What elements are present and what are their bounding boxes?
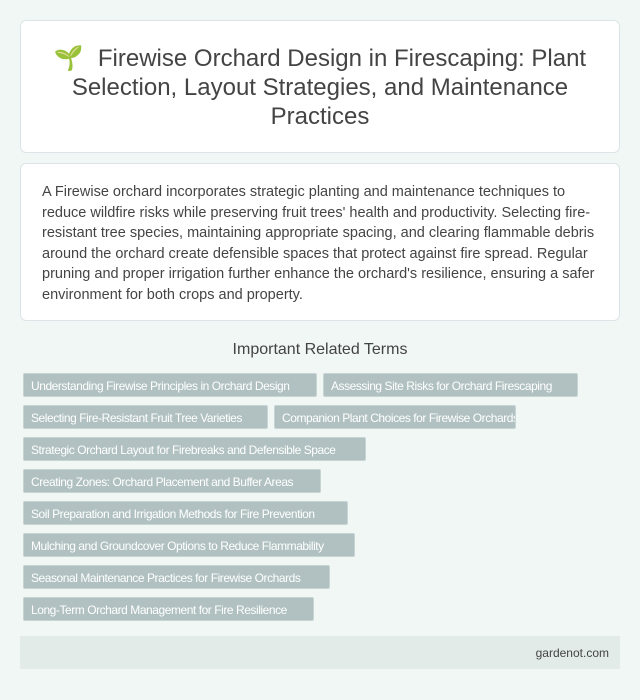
tags: Creating Zones: Orchard Placement and Buffer Areas bbox=[31, 475, 293, 489]
tags: Long-Term Orchard Management for Fire Resilience bbox=[31, 603, 287, 617]
tags: Understanding Firewise Principles in Orchard Design bbox=[31, 379, 290, 393]
tags: Selecting Fire-Resistant Fruit Tree Varieties bbox=[31, 411, 242, 425]
section heading: Important Related Terms bbox=[233, 341, 407, 358]
footer source: gardenot.com bbox=[536, 646, 609, 660]
footer bbox=[20, 636, 620, 669]
tags: Strategic Orchard Layout for Firebreaks and Defensible Space bbox=[31, 443, 336, 457]
tags: Mulching and Groundcover Options to Reduce Flammability bbox=[31, 539, 324, 553]
tags: Seasonal Maintenance Practices for Firewise Orchards bbox=[31, 571, 300, 585]
title: 🌱 bbox=[54, 45, 84, 72]
description panel bbox=[20, 163, 620, 321]
description text: A Firewise orchard incorporates strategic planting and maintenance techniques to reduce wildfire risks while preserving fruit trees' health and productivity. Selecting fire-resistant tree species, maintaining appropriate spacing, and clearing flammable debris around the orchard create defensible spaces that protect against fire spread. Regular pruning and proper irrigation further enhance the orchard's resilience, ensuring a safer environment for both crops and property. bbox=[42, 184, 594, 302]
tags: Soil Preparation and Irrigation Methods for Fire Prevention bbox=[31, 507, 315, 521]
tags: Companion Plant Choices for Firewise Orchards bbox=[282, 411, 516, 425]
tags: Assessing Site Risks for Orchard Firescaping bbox=[331, 379, 552, 393]
title panel bbox=[20, 20, 620, 153]
title: Firewise Orchard Design in Firescaping: Plant Selection, Layout Strategies, and Maintenance Practices bbox=[72, 45, 586, 130]
